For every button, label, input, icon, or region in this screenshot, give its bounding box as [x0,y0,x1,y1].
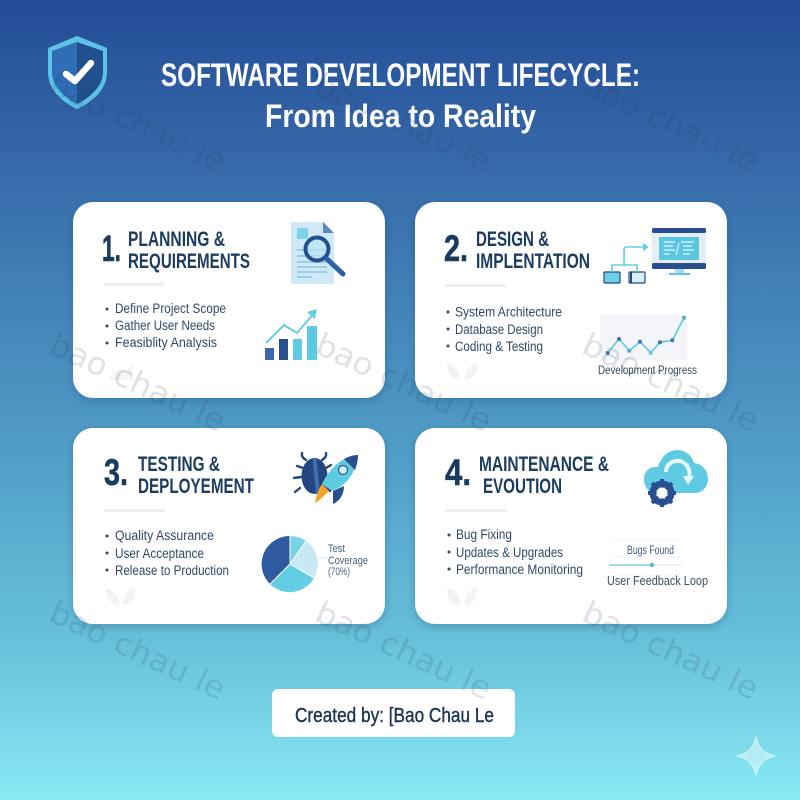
heading: planning: REQUIREMENTS [128,250,250,273]
heading: maintenance: EVOUTION [483,475,562,498]
footer credit [272,689,515,737]
bullet list [106,528,229,578]
icon: bug [294,453,331,494]
line chart: development progress [598,315,697,377]
step number 3: 3. [104,452,128,493]
heading: design: DESIGN & [476,228,549,251]
watermark: bao chau le [577,67,764,180]
pie chart: test coverage: Test [328,543,345,555]
bullet list: User Acceptance [115,546,204,561]
bullet list: Performance Monitoring [456,562,583,577]
faint leaf mark [447,363,478,380]
heading: testing [138,453,254,498]
bullet list: Release to Production [115,563,229,578]
bullet list [448,527,583,577]
bullet list: Database Design [455,322,543,337]
step number 4: 4. [445,452,471,493]
watermark: bao chau le [44,595,231,708]
watermark: bao chau le [310,327,497,440]
icon: sparkle [737,737,775,775]
bullet list: Feasiblity Analysis [115,335,217,350]
chart: user feedback loop: User Feedback Loop [607,573,708,588]
icon: cloud with gear [644,450,708,507]
faint leaf mark [447,588,477,605]
bullet list: Define Project Scope [115,301,226,316]
chart: user feedback loop [607,540,708,588]
watermark: bao chau le [44,327,231,440]
bar chart with trend arrow [265,309,317,360]
heading: maintenance: MAINTENANCE & [479,453,609,476]
watermark: bao chau le [44,67,231,180]
watermark [44,67,764,708]
pie chart: test coverage: Coverage [328,555,368,567]
heading: maintenance [479,453,609,498]
watermark: bao chau le [310,595,497,708]
faint leaf mark [106,588,135,605]
faint chart mark [108,362,133,380]
icon: document with magnifier [291,222,343,284]
heading: planning [128,228,250,273]
title: SOFTWARE DEVELOPMENT LIFECYCLE: [161,57,640,93]
heading: planning: PLANNING & [128,228,225,251]
step number 1: 1. [102,228,121,269]
bullet list [446,304,562,354]
panel: testing and deployment [73,428,385,624]
bullet list [106,301,226,350]
title [161,57,640,134]
icon: rocket [315,455,358,504]
line chart: development progress: Development Progress [598,365,697,377]
watermark: bao chau le [310,67,497,180]
heading: testing: DEPLOYEMENT [138,475,254,498]
panel: planning and requirements [73,202,385,398]
footer credit: Created by: [Bao Chau Le [295,705,494,727]
heading: design [476,228,590,273]
bullet list: Gather User Needs [115,318,215,333]
heading: design: IMPLENTATION [476,250,590,273]
watermark: bao chau le [577,327,764,440]
step number 2: 2. [444,228,468,269]
chart: user feedback loop: Bugs Found [627,545,674,557]
bullet list: Coding & Testing [455,339,543,354]
pie chart: test coverage [262,536,368,592]
bullet list: System Architecture [455,304,562,320]
bullet list: Quality Assurance [115,528,214,543]
pie chart: test coverage: (70%) [328,566,350,578]
bullet list: Bug Fixing [456,527,512,542]
icon: monitor with code [652,228,706,275]
panel: design and implementation [415,202,727,398]
icon: shield with check [48,36,107,109]
panel: maintenance and evolution [415,428,727,624]
title: From Idea to Reality [265,98,536,134]
watermark: bao chau le [577,595,764,708]
heading: testing: TESTING & [138,453,220,476]
bullet list: Updates & Upgrades [456,545,563,560]
icon: flow diagram [604,243,649,283]
